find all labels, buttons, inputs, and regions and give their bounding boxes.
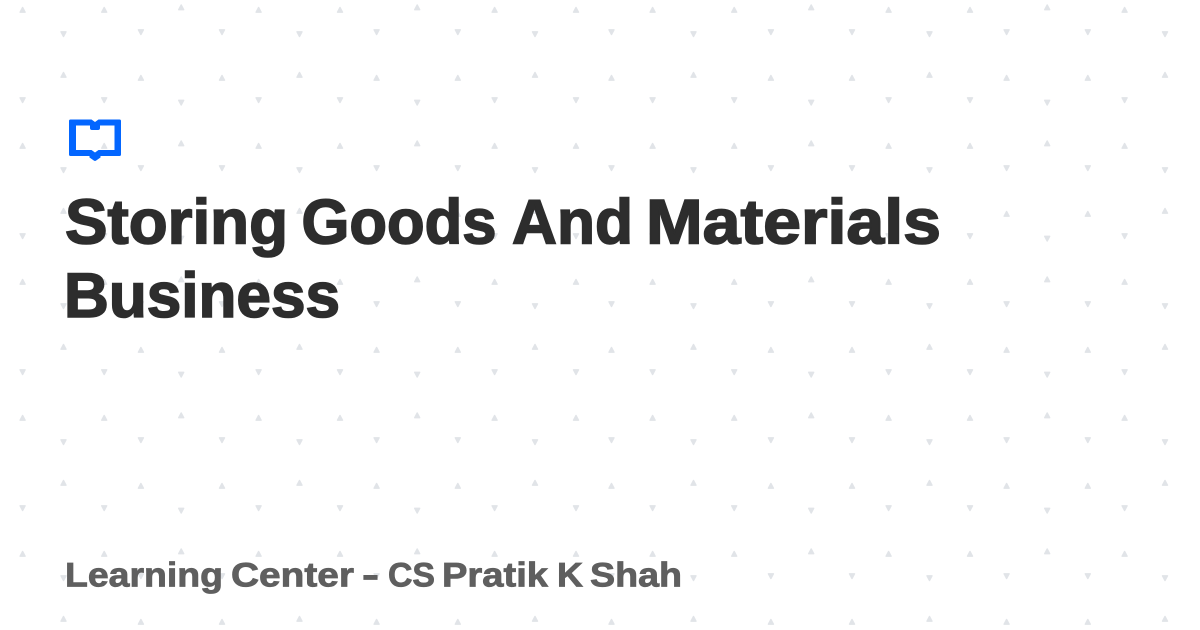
footer text: Learning Center - CS Pratik K Shah: CS (388, 556, 435, 594)
title: Business (64, 261, 340, 331)
title: Storing (65, 188, 288, 258)
title: And (512, 188, 633, 258)
title (64, 188, 941, 331)
title: Goods (302, 188, 496, 258)
footer text: Learning Center - CS Pratik K Shah: - (362, 556, 379, 594)
footer text: Learning Center - CS Pratik K Shah: Shah (590, 556, 682, 594)
title: Materials (646, 188, 941, 258)
footer text: Learning Center - CS Pratik K Shah: Pratik (442, 556, 548, 594)
icon: open book (69, 120, 121, 161)
footer text: Learning Center - CS Pratik K Shah (65, 556, 682, 594)
footer text: Learning Center - CS Pratik K Shah: Learning (65, 556, 223, 594)
footer text: Learning Center - CS Pratik K Shah: Center (231, 556, 354, 594)
footer text: Learning Center - CS Pratik K Shah: K (557, 556, 583, 594)
